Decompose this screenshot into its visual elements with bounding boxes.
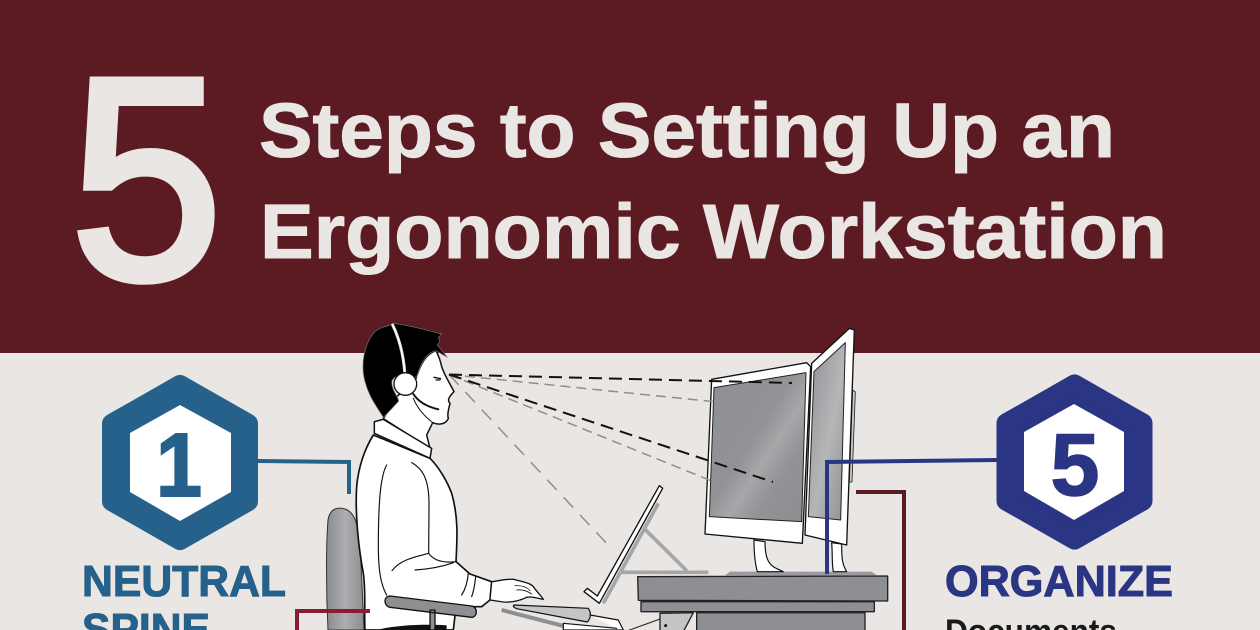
body background [0, 353, 1260, 630]
step 1 badge: 1 [156, 416, 202, 516]
workstation [584, 328, 888, 630]
side monitor screen [808, 343, 845, 520]
document holder [584, 486, 663, 603]
monitor base [725, 572, 877, 575]
keyboard wrist rest [513, 605, 590, 622]
shirt [356, 435, 492, 630]
desk [625, 576, 888, 630]
keyboard tray shadow [502, 610, 563, 626]
sight lines [449, 374, 727, 547]
step 1 heading [82, 557, 286, 630]
front monitor screen [709, 373, 806, 522]
monitor stands [754, 540, 783, 572]
red connector [297, 611, 370, 630]
step 1 connector [258, 461, 349, 494]
jaw line [413, 398, 433, 423]
step 1 heading: NEUTRAL [82, 557, 286, 606]
document holder stand [603, 503, 708, 603]
front monitor [705, 363, 811, 543]
black sight lines [449, 374, 792, 482]
headset mic [413, 394, 438, 409]
eye [434, 377, 441, 380]
step 5 badge: 5 [1051, 415, 1099, 514]
step 5 connector [827, 460, 997, 574]
bracket pivot [664, 624, 667, 627]
armrest [385, 596, 476, 630]
title text: Ergonomic Workstation [260, 189, 1167, 275]
header band [0, 0, 1260, 353]
chair back [326, 508, 364, 630]
side monitor back [849, 390, 855, 482]
person with headset [356, 323, 623, 630]
hand [490, 579, 543, 602]
shirt fold lines [378, 463, 476, 597]
trousers [377, 625, 447, 630]
finger lines [515, 586, 532, 594]
hair [363, 323, 447, 417]
headset ear cup [394, 373, 417, 395]
keyboard tray [563, 615, 623, 630]
neck and face [383, 351, 454, 448]
headset band [393, 325, 405, 385]
step 5 heading: ORGANIZE [945, 557, 1173, 606]
title: big numeral 5: 5 [71, 20, 222, 340]
dark red connector [856, 492, 904, 630]
collar [374, 419, 432, 458]
title text [259, 88, 1167, 275]
side monitor [805, 328, 854, 545]
step 5 badge [1006, 384, 1142, 540]
title text: Steps to Setting Up an [259, 88, 1115, 174]
step 1 badge [112, 385, 248, 540]
